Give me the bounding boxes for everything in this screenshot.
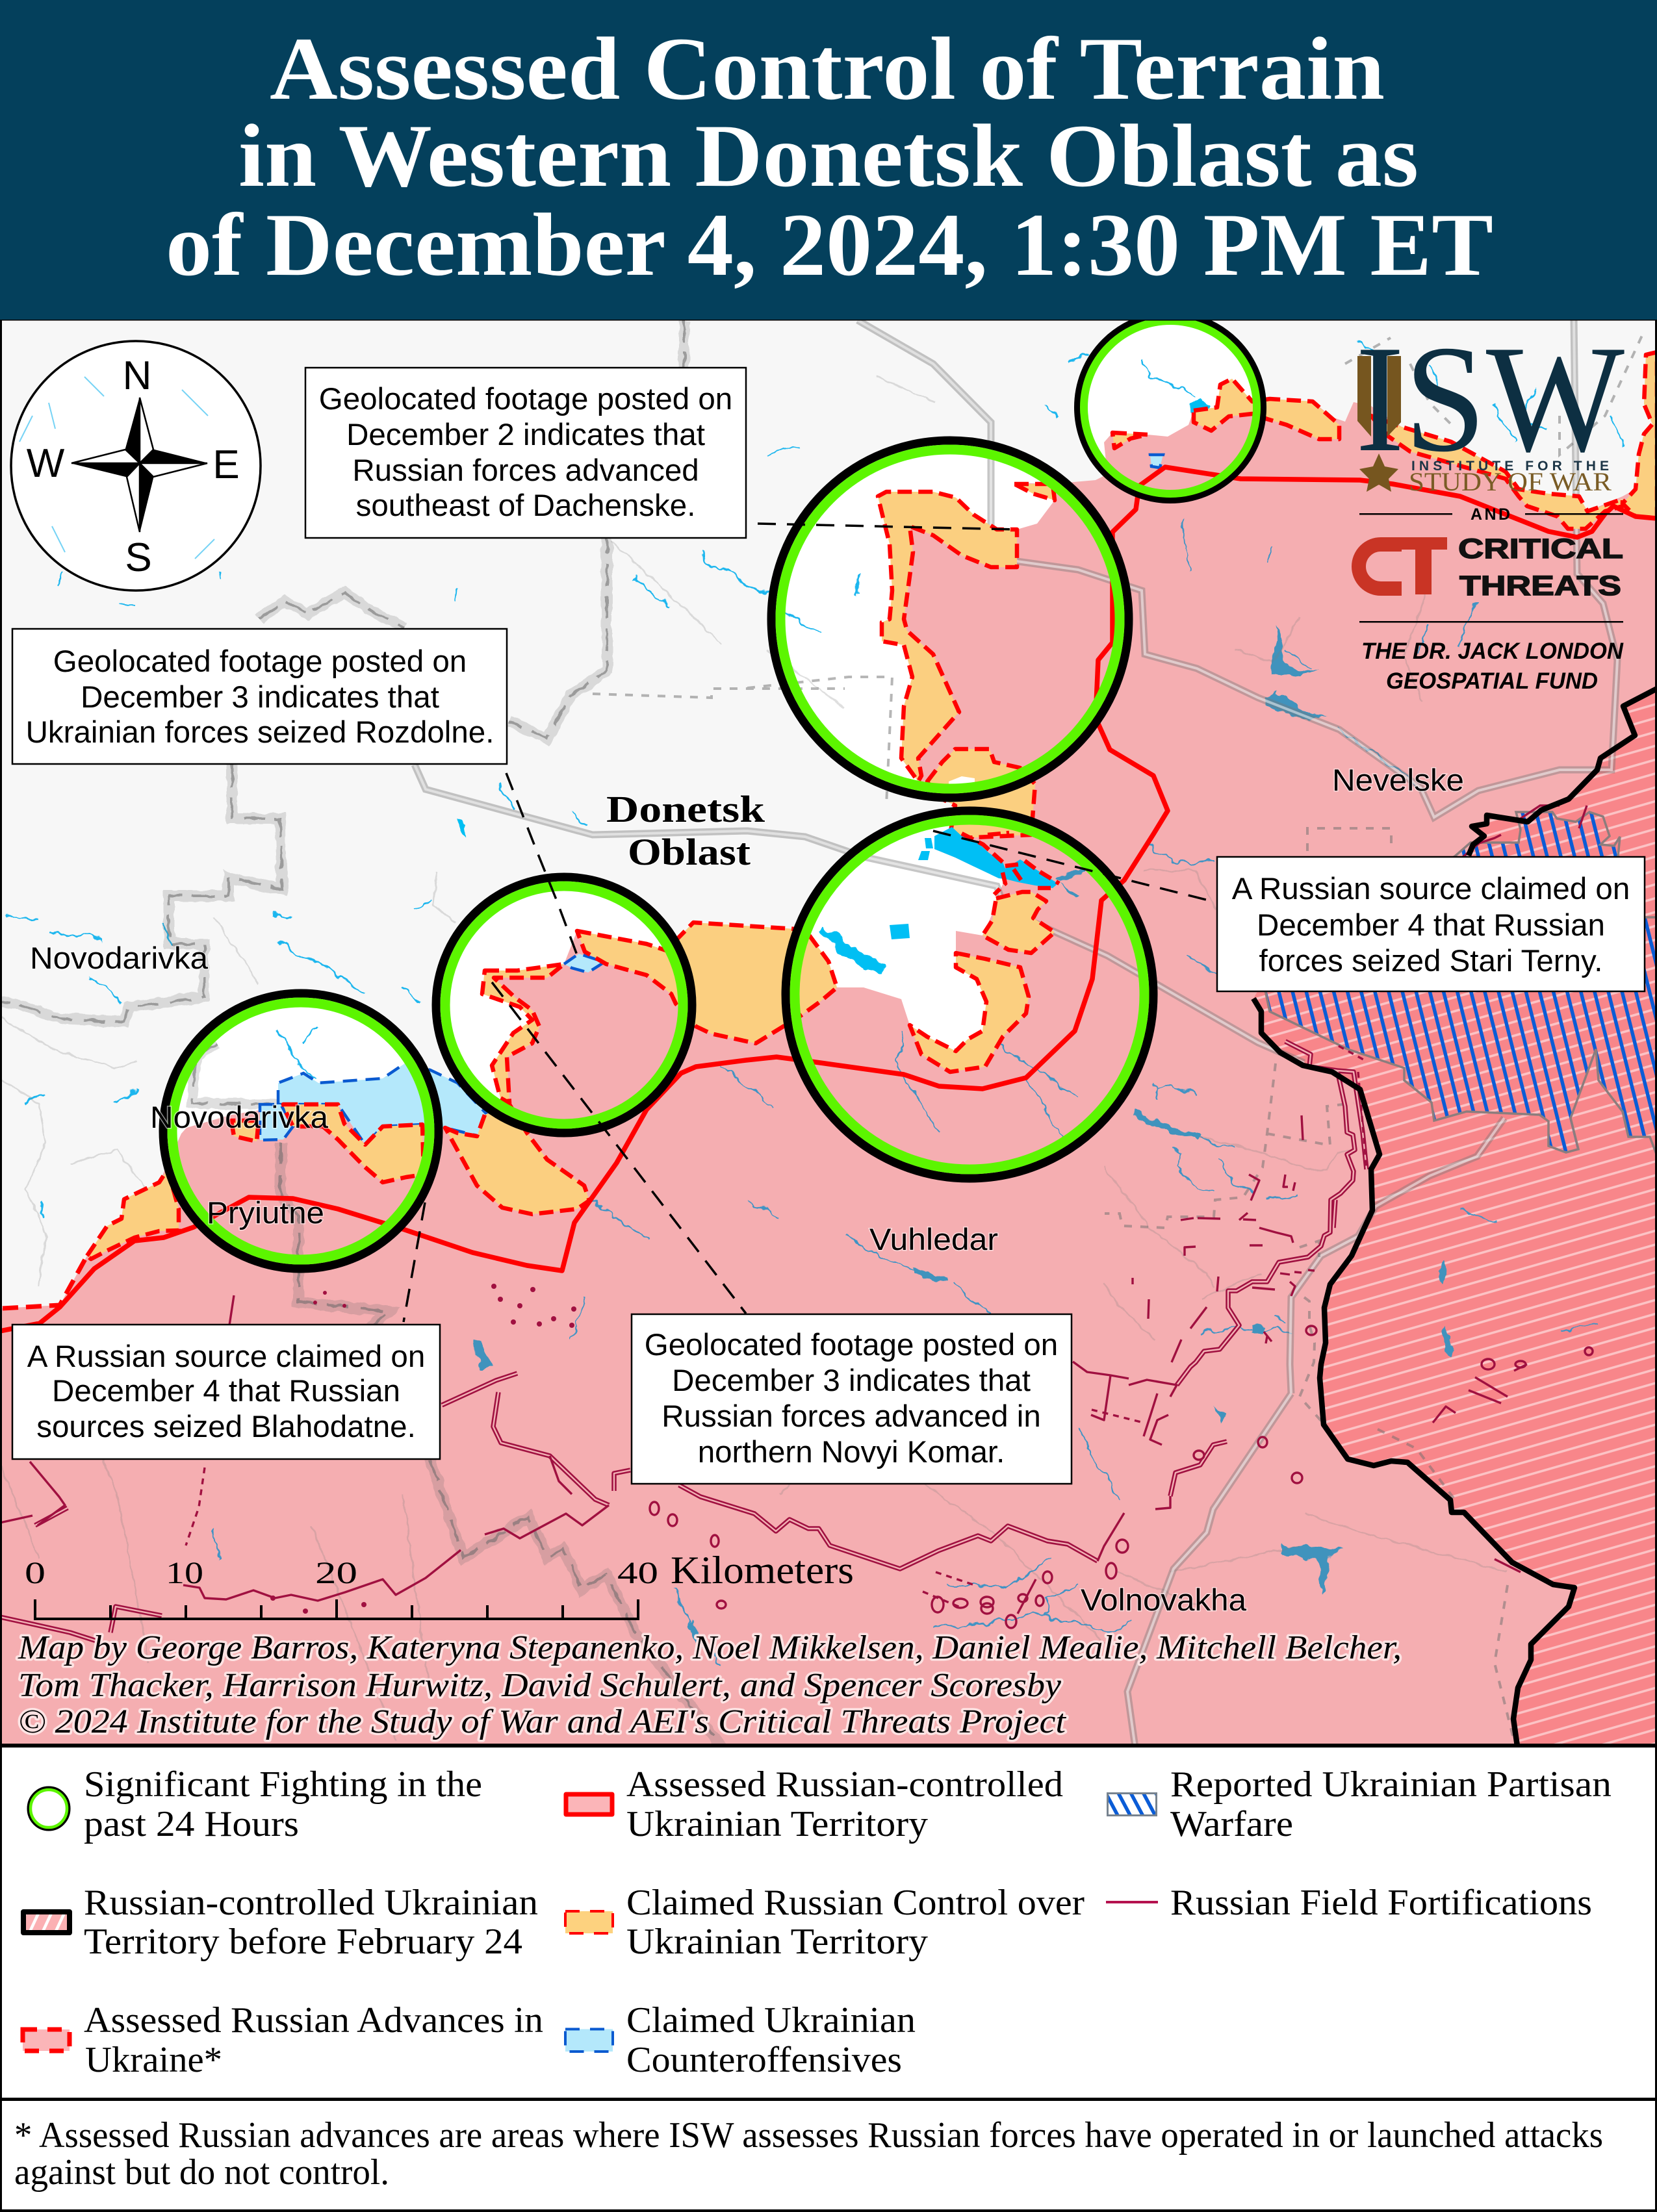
callout: Blahodatne: December 4 that Russian (52, 1374, 400, 1408)
compass rose: E (212, 442, 240, 487)
scale bar: 40 (617, 1556, 658, 1590)
place labels: Novodarivka (30, 941, 209, 976)
map frame (1, 320, 1656, 1746)
legend: pre-invasion territory: Russian-controlled Ukrainian (84, 1883, 538, 1923)
claimed Ukrainian counteroffensives (260, 455, 1163, 1145)
and divider: AND (1471, 505, 1510, 524)
callout: Stari Terny: forces seized Stari Terny. (1259, 944, 1602, 978)
legend: claimed counteroffensives: Counteroffensives (626, 2040, 902, 2080)
callout: Novyi Komar: Geolocated footage posted on (645, 1328, 1058, 1362)
occupied before February 24 hatching (1253, 689, 1657, 1751)
legend: claimed counteroffensives (565, 2000, 916, 2080)
callout: Dachenske: Russian forces advanced (352, 453, 699, 488)
callout: Novyi Komar: northern Novyi Komar. (698, 1435, 1005, 1469)
legend: field fortifications: Russian Field Fortifications (1170, 1883, 1592, 1923)
legend: partisan warfare: Warfare (1170, 1804, 1293, 1844)
callout: Rozdolne: December 3 indicates that (81, 680, 439, 715)
reported Ukrainian partisan warfare hatching (1264, 812, 1657, 1156)
geospatial fund credit (1361, 639, 1624, 694)
compass rose: W (27, 441, 65, 486)
compass rose: N (123, 353, 151, 398)
callout: Novyi Komar (632, 1314, 1072, 1484)
callout: Novyi Komar: Russian forces advanced in (662, 1399, 1041, 1434)
map background (0, 318, 1657, 1748)
legend: claimed counteroffensives: Claimed Ukrainian (626, 2000, 916, 2040)
legend: assessed advances: Assessed Russian Advances in (84, 2000, 543, 2040)
Stari Terny reservoir (890, 827, 1058, 939)
scale bar: Kilometers (671, 1549, 854, 1592)
place labels (30, 763, 1464, 1618)
legend: pre-invasion territory (23, 1883, 538, 1962)
map credits: Map by George Barros, Kateryna Stepanenko, Noel Mikkelsen, Daniel Mealie, Mitchell Belcher, (18, 1629, 1402, 1666)
legend: partisan warfare: Reported Ukrainian Partisan (1170, 1764, 1612, 1805)
oblast label (606, 788, 765, 873)
legend panel (0, 1744, 1657, 2212)
place labels: Vuhledar (869, 1223, 998, 1257)
rivers on white ground (3, 344, 1625, 1221)
footnote (14, 2115, 1603, 2193)
footnote: * Assessed Russian advances are areas where ISW assesses Russian forces have operated in or launched attacks (14, 2115, 1603, 2155)
circle: north (1077, 314, 1263, 500)
callout: Dachenske: December 2 indicates that (346, 418, 705, 452)
legend: significant fighting: Significant Fighting in the (84, 1764, 482, 1805)
circle: Rozdolne (436, 877, 692, 1133)
place labels: Novodarivka (150, 1100, 329, 1135)
geospatial fund credit: THE DR. JACK LONDON (1361, 639, 1624, 664)
significant fighting circles (163, 314, 1263, 1269)
place labels: Pryiutne (207, 1196, 324, 1230)
title: of December 4, 2024, 1:30 PM ET (166, 195, 1493, 294)
callout: Dachenske: Geolocated footage posted on (319, 382, 732, 416)
claimed Russian control areas (87, 352, 1657, 1259)
Critical Threats logo (1359, 533, 1623, 622)
Critical Threats logo: CRITICAL (1458, 533, 1623, 565)
Critical Threats logo: THREATS (1459, 570, 1621, 602)
callout: Rozdolne: Ukrainian forces seized Rozdolne. (26, 715, 494, 750)
fortification double trench lines (0, 1041, 1367, 1643)
fortification single trench lines and positions (0, 806, 1593, 1628)
callout: Novyi Komar: December 3 indicates that (672, 1364, 1031, 1398)
ISW logo: STUDY OF WAR (1409, 467, 1612, 496)
callout: Blahodatne: sources seized Blahodatne. (36, 1410, 416, 1444)
scale bar (25, 1549, 854, 1619)
dotted district boundaries (593, 331, 1644, 1741)
legend: claimed control: Ukrainian Territory (626, 1922, 928, 1962)
compass rose (11, 341, 261, 591)
rivers on pink ground (214, 520, 1599, 1668)
oblast label: Oblast (628, 831, 751, 873)
circle: Novodarivka (163, 993, 439, 1269)
title: in Western Donetsk Oblast as (238, 106, 1419, 205)
legend: significant fighting: past 24 Hours (84, 1804, 299, 1844)
thin secondary roads (0, 377, 1508, 1741)
fighting circle interiors (168, 320, 1258, 1264)
main roads (415, 318, 1617, 1748)
legend: assessed advances: Ukraine* (85, 2040, 222, 2080)
callout: Stari Terny: A Russian source claimed on (1232, 872, 1630, 906)
pre-invasion control line (1253, 689, 1657, 1751)
geospatial fund credit: GEOSPATIAL FUND (1386, 668, 1598, 694)
red dashes west edge (3, 1256, 87, 1308)
callout: Rozdolne: Geolocated footage posted on (53, 644, 467, 679)
scale bar: 20 (315, 1556, 357, 1590)
map credits: Tom Thacker, Harrison Hurwitz, David Schulert, and Spencer Scoresby (18, 1667, 1062, 1704)
callout: Blahodatne (12, 1325, 440, 1459)
header band (0, 0, 1657, 320)
footnote: against but do not control. (14, 2152, 389, 2193)
callout: Dachenske: southeast of Dachenske. (356, 489, 695, 523)
legend: partisan warfare (1107, 1764, 1612, 1844)
assessed Russian control line (0, 467, 1657, 1331)
callout: Stari Terny: December 4 that Russian (1257, 908, 1605, 943)
title (166, 19, 1493, 294)
legend: assessed control: Ukrainian Territory (626, 1804, 928, 1844)
oblast label: Donetsk (606, 788, 765, 830)
ISW logo: ISW (1355, 314, 1625, 484)
ISW logo: INSTITUTE FOR THE (1411, 459, 1609, 474)
scale bar: 0 (25, 1556, 45, 1590)
callout leader lines (404, 524, 1209, 1322)
map credits: © 2024 Institute for the Study of War and AEI's Critical Threats Project (18, 1703, 1067, 1740)
circle: Dachenske (771, 440, 1129, 798)
legend: pre-invasion territory: Territory before February 24 (84, 1922, 522, 1962)
legend: claimed control: Claimed Russian Control over (626, 1883, 1085, 1923)
legend: assessed advances (23, 2000, 543, 2080)
assessed Russian-controlled territory (0, 352, 1657, 1748)
callout: Dachenske (305, 368, 746, 538)
circle: Stari Terny (786, 811, 1153, 1178)
map credits (18, 1629, 1402, 1740)
compass rose: S (125, 535, 152, 580)
callout: Stari Terny (1217, 857, 1645, 991)
legend: claimed control (565, 1883, 1085, 1962)
scale bar: 10 (166, 1556, 203, 1590)
callout: Blahodatne: A Russian source claimed on (27, 1340, 425, 1374)
title: Assessed Control of Terrain (270, 19, 1385, 118)
legend: assessed control (566, 1764, 1063, 1844)
place labels: Volnovakha (1081, 1583, 1247, 1618)
legend: assessed control: Assessed Russian-controlled (626, 1764, 1063, 1805)
callout: Rozdolne (12, 629, 507, 764)
oblast boundaries (0, 320, 722, 1748)
place labels: Nevelske (1332, 763, 1464, 798)
legend: significant fighting (29, 1764, 482, 1844)
red dashes around Stari Terny (962, 833, 1059, 895)
